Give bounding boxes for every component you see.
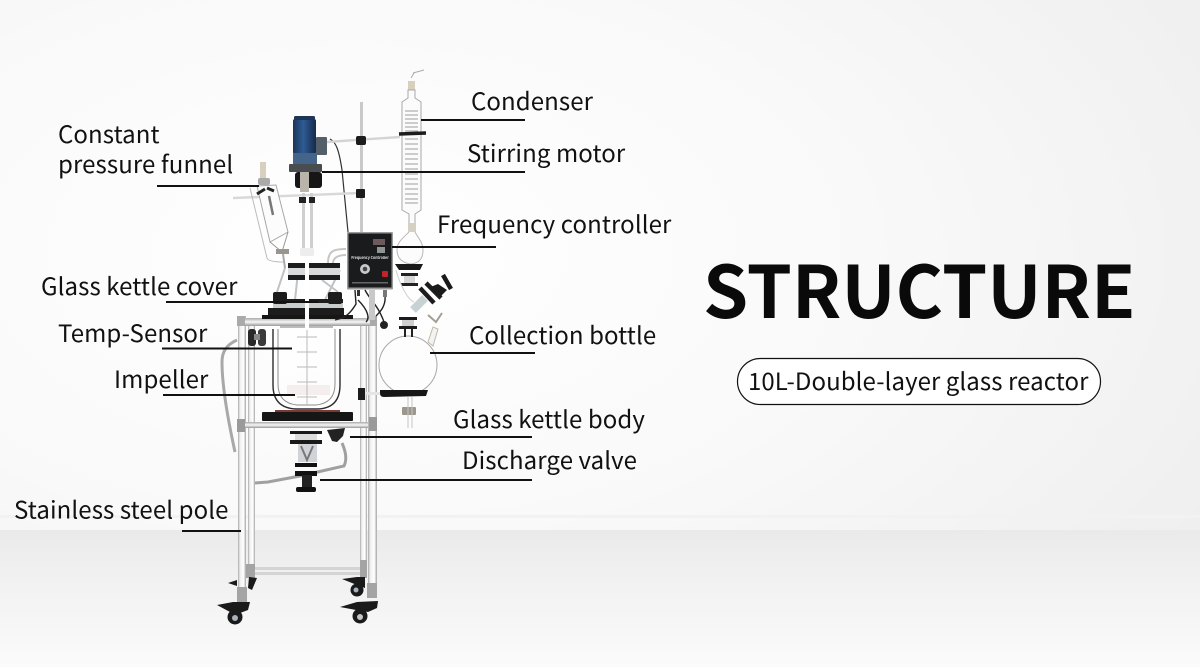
frequency controller (347, 232, 393, 320)
label: collection bottle: Collection bottle (469, 316, 656, 351)
label: stainless steel pole: Stainless steel pole (14, 490, 229, 526)
discharge valve (290, 428, 345, 492)
label: constant pressure funnel: pressure funnel (58, 145, 233, 180)
glass kettle cover (262, 249, 353, 319)
constant pressure funnel (250, 162, 289, 268)
label: discharge valve: Discharge valve (462, 441, 637, 476)
glass shaft (300, 193, 314, 328)
wheels (217, 577, 378, 624)
label: constant pressure funnel: Constant (58, 115, 160, 150)
label: constant pressure funnel (58, 115, 259, 187)
condenser (397, 70, 426, 264)
label: temp sensor: Temp-Sensor (58, 314, 208, 349)
wiring (330, 139, 348, 232)
temp sensor (248, 329, 266, 346)
label: impeller: Impeller (114, 360, 209, 395)
retort stand rods (233, 102, 400, 233)
glass kettle body (262, 327, 353, 421)
frequency controller: Frequency Controller (351, 255, 389, 261)
label: stirring motor: Stirring motor (467, 134, 626, 169)
title: STRUCTURE (703, 234, 1136, 339)
label: frequency controller: Frequency controller (437, 205, 672, 240)
subtitle pill: 10L-Double-layer glass reactor (748, 362, 1089, 397)
label: glass kettle cover: Glass kettle cover (41, 267, 238, 302)
hose (222, 340, 237, 452)
label: condenser: Condenser (471, 82, 594, 117)
collection bottle (358, 264, 451, 428)
reactor illustration (217, 70, 451, 624)
lower pipe (255, 443, 346, 483)
frame: stainless steel poles (237, 316, 377, 602)
stirring motor (289, 116, 327, 203)
label: glass kettle body: Glass kettle body (453, 400, 645, 435)
